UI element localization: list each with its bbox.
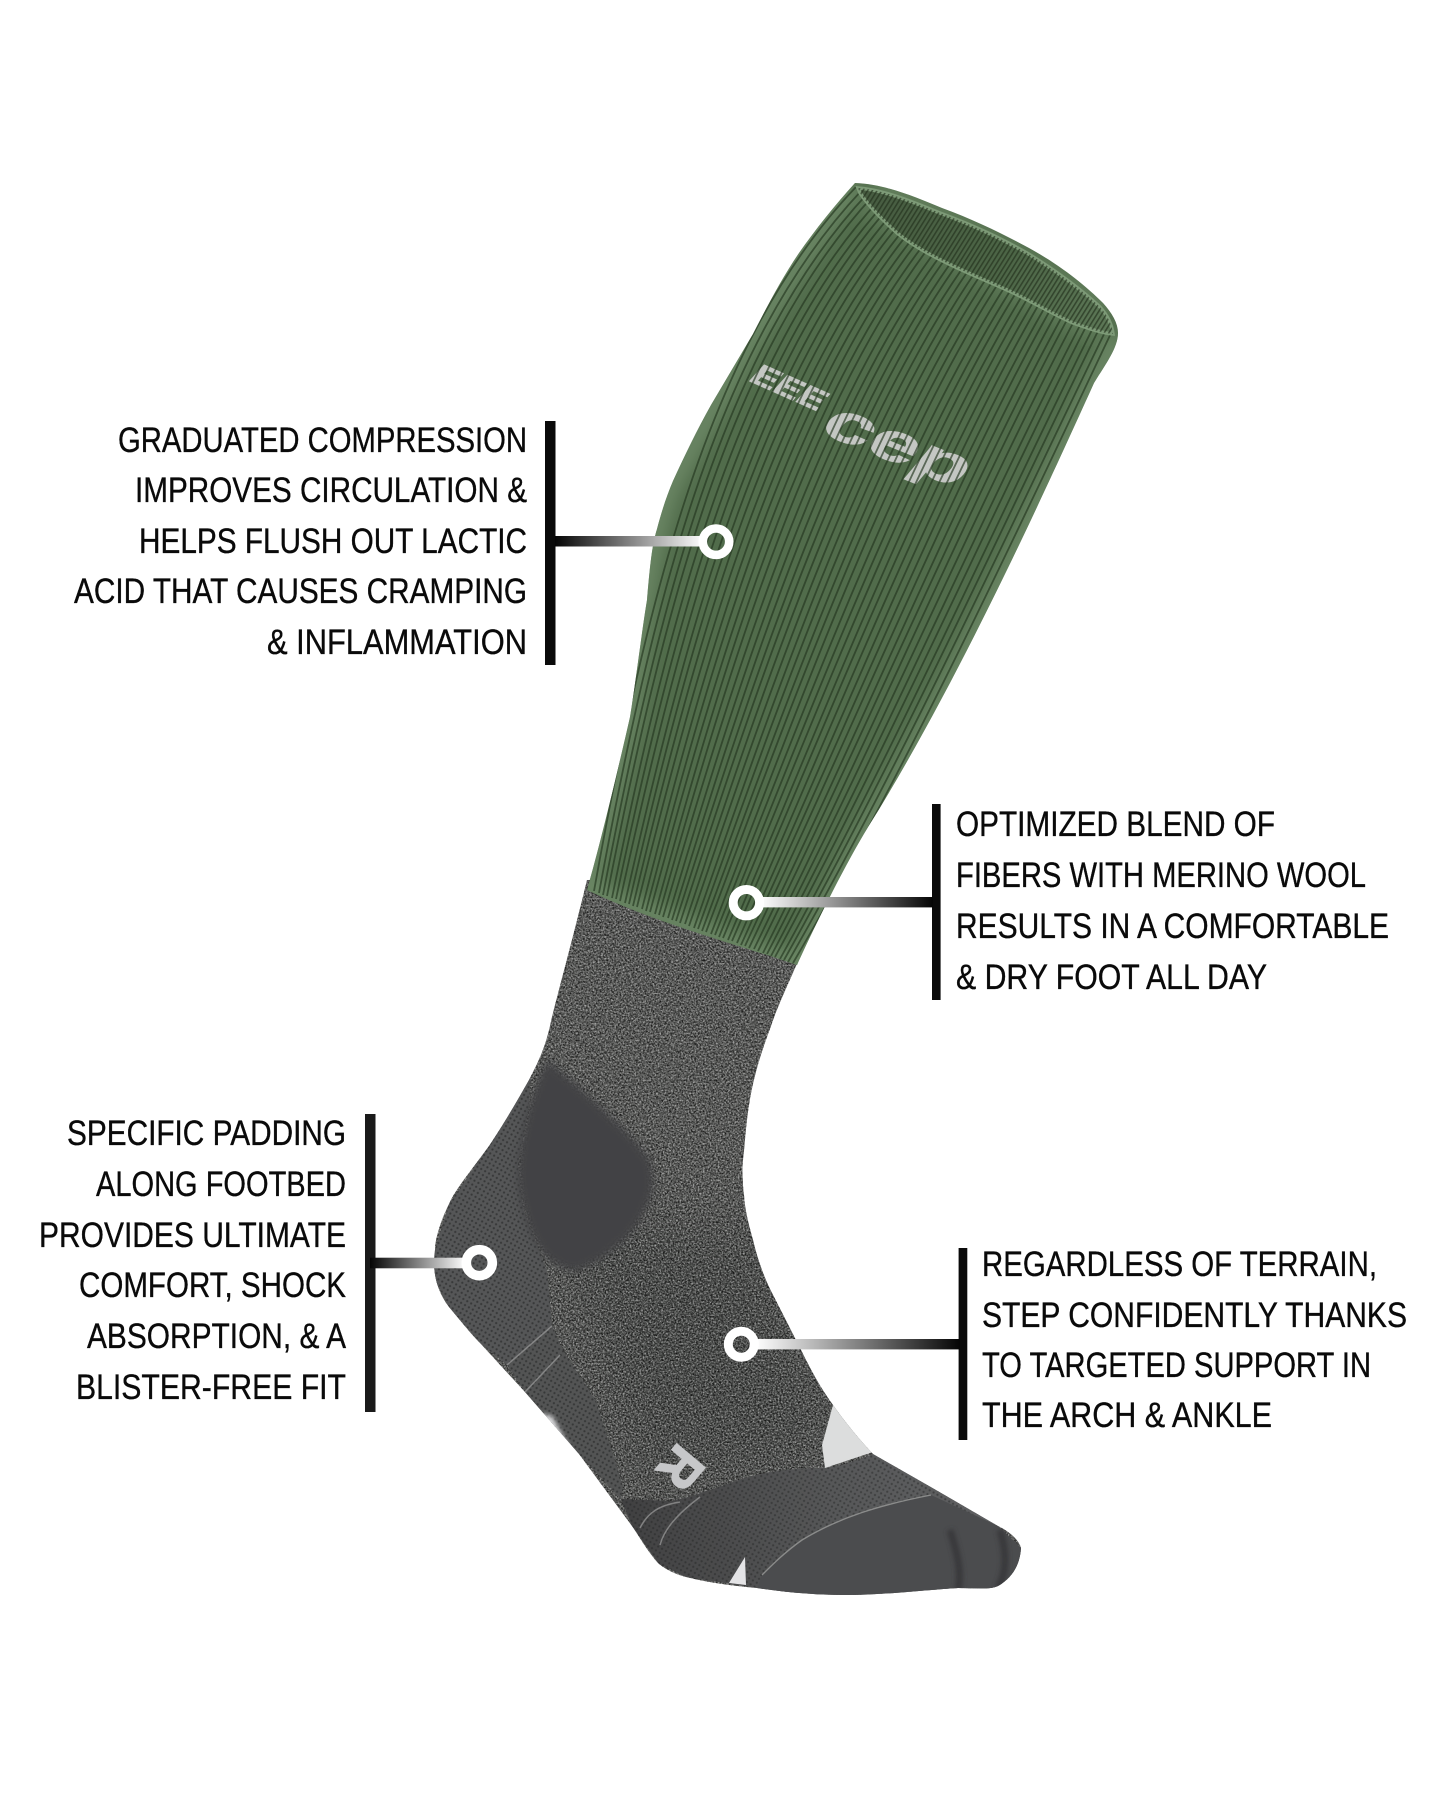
product photo: compression sock	[420, 160, 1140, 1610]
marker ring	[703, 528, 729, 555]
callout text: TO TARGETED SUPPORT IN	[982, 1346, 1371, 1385]
connector line	[753, 1339, 960, 1349]
callout text: IMPROVES CIRCULATION &	[135, 471, 527, 510]
callout text: OPTIMIZED BLEND OF	[956, 805, 1275, 844]
heel panel	[433, 1072, 552, 1365]
size mark: R: R	[645, 1433, 716, 1502]
sole panel	[507, 1325, 623, 1499]
callout text: FIBERS WITH MERINO WOOL	[956, 856, 1366, 895]
callout bar	[959, 1248, 967, 1440]
marker ring	[466, 1250, 492, 1276]
callout text: HELPS FLUSH OUT LACTIC	[139, 522, 527, 561]
brand logo on cuff	[749, 364, 968, 484]
callout: merino wool blend	[733, 804, 1389, 1000]
connector line	[758, 897, 933, 907]
callout text	[982, 1245, 1407, 1435]
callout text: COMFORT, SHOCK	[79, 1266, 346, 1305]
callout text: ABSORPTION, & A	[87, 1317, 347, 1356]
callout: graduated compression	[74, 421, 729, 665]
knit ribs	[594, 187, 1113, 963]
callout text	[956, 805, 1389, 997]
brand logo on cuff: cep	[808, 391, 990, 498]
marker ring	[728, 1331, 754, 1357]
ankle padding patch	[518, 1060, 653, 1271]
light arch patch	[822, 1405, 873, 1468]
callout text	[39, 1114, 347, 1407]
brand logo on cuff: EEE	[743, 359, 836, 416]
toe cap	[757, 1495, 1021, 1597]
callout text: ALONG FOOTBED	[96, 1165, 346, 1204]
toe band	[621, 1454, 1021, 1595]
callout text: & INFLAMMATION	[267, 623, 527, 662]
connector line	[370, 1258, 468, 1268]
toe seam	[762, 1495, 931, 1575]
callout text: THE ARCH & ANKLE	[982, 1396, 1272, 1435]
cuff opening	[858, 188, 1113, 334]
seam lines	[507, 1326, 700, 1545]
callout: arch and ankle support	[728, 1245, 1407, 1440]
connector line	[555, 536, 705, 546]
callout text: & DRY FOOT ALL DAY	[956, 958, 1267, 997]
marker ring	[733, 890, 760, 916]
callout bar	[365, 1114, 376, 1412]
callout text: PROVIDES ULTIMATE	[39, 1216, 346, 1255]
callout text: GRADUATED COMPRESSION	[118, 421, 527, 460]
light toe mark	[729, 1557, 746, 1585]
callout: footbed padding	[39, 1114, 492, 1412]
callout text: BLISTER-FREE FIT	[76, 1368, 346, 1407]
sock foot: grey merino wool section	[420, 870, 1040, 1610]
toe creases	[950, 1530, 1005, 1590]
light sole patch	[542, 1410, 572, 1446]
callout text	[74, 421, 527, 662]
callout bar	[545, 421, 556, 665]
callout text: ACID THAT CAUSES CRAMPING	[74, 572, 527, 611]
callout text: SPECIFIC PADDING	[67, 1114, 346, 1153]
callout bar	[932, 804, 941, 1000]
sock leg: green ribbed section	[587, 183, 1118, 965]
callout text: REGARDLESS OF TERRAIN,	[982, 1245, 1377, 1284]
